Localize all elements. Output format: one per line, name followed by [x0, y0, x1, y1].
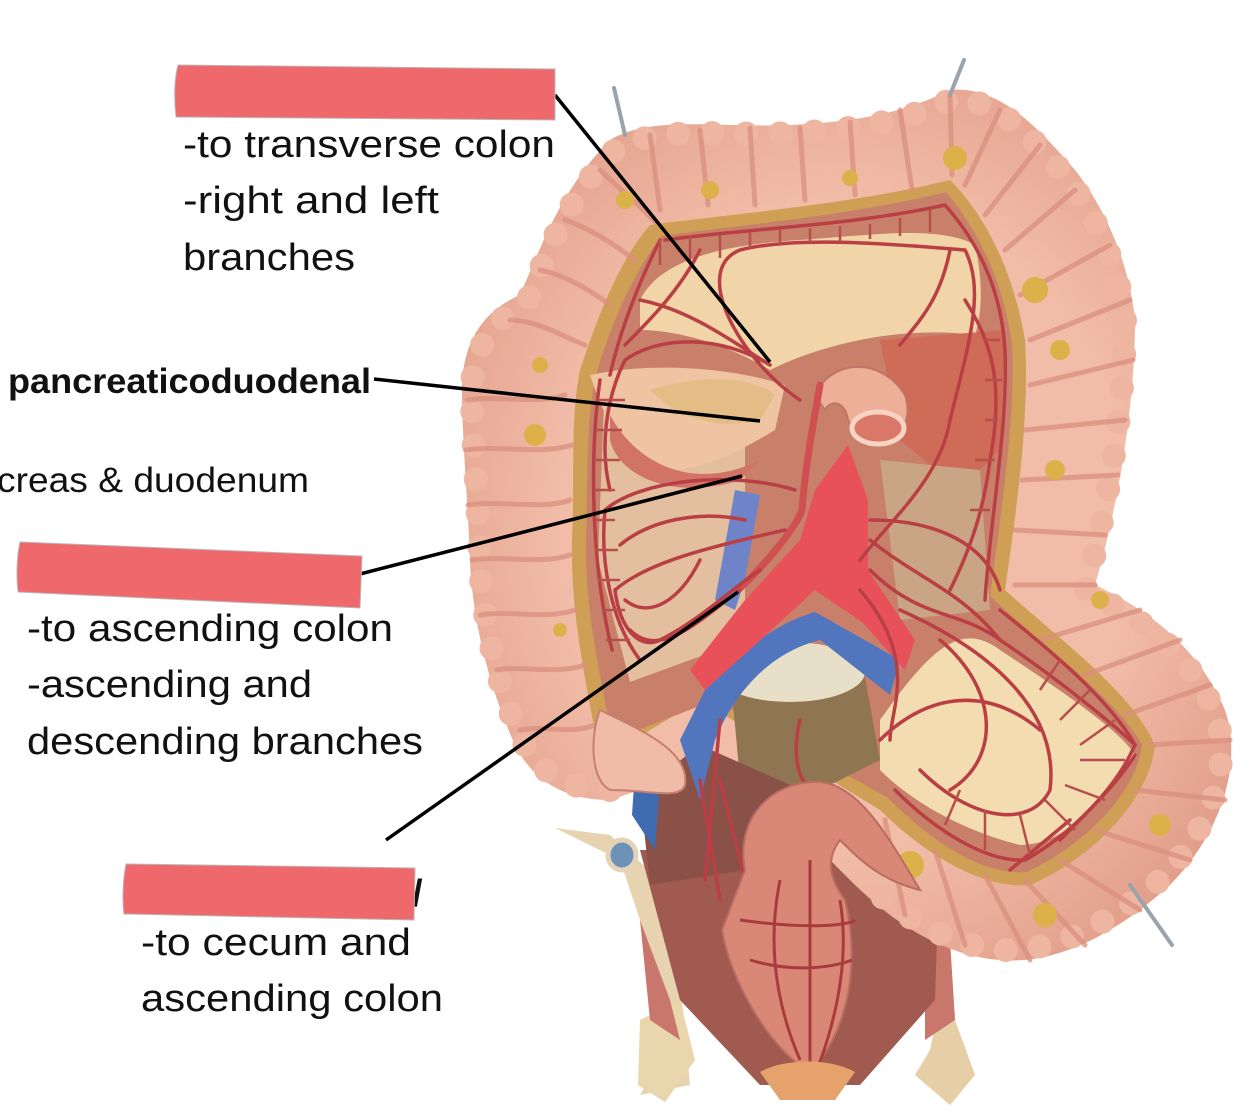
vasa recta	[594, 210, 1125, 855]
stomach stump / duodenal loop	[815, 367, 908, 445]
redaction label bar 2	[17, 542, 362, 608]
label: pancreaticoduodenal: pancreaticoduodenal	[8, 362, 371, 401]
text block: ascending colon branch	[27, 608, 423, 763]
anatomical illustration: large intestine and mesenteric arteries	[462, 60, 1231, 1105]
colon haustra folds	[466, 95, 1230, 960]
leader line: middle colic artery	[555, 95, 770, 362]
text block: cecum branch: -to cecum and	[141, 922, 411, 964]
pelvis and pelvic bones	[555, 828, 975, 1105]
cecum	[593, 710, 685, 793]
leader line: ileocolic artery	[386, 592, 738, 840]
redaction label bar 1	[175, 65, 555, 120]
superior mesenteric artery branches	[594, 205, 1135, 900]
text block: transverse colon branch: -right and left	[183, 180, 439, 222]
text block: transverse colon branch: -to transverse colon	[183, 124, 555, 166]
mesentery background	[572, 180, 1155, 885]
pelvic cavity	[640, 850, 940, 1085]
small vein near cecum	[632, 770, 660, 850]
central retroperitoneum	[730, 650, 880, 790]
text block: transverse colon branch	[183, 124, 555, 279]
text block: transverse colon branch: branches	[183, 237, 355, 279]
fat appendages	[524, 146, 1171, 927]
inferior vena cava	[715, 490, 760, 610]
leader line: inferior pancreaticoduodenal	[374, 379, 760, 421]
redaction label bar 3	[123, 864, 415, 920]
sigmoid colon	[722, 782, 920, 1072]
sigmoid mesocolon: cream panel	[880, 638, 1135, 845]
hidden label remainder glyph: /	[412, 873, 423, 915]
colon haustral lobes along outer edge	[472, 100, 1221, 950]
pancreas and duodenum	[590, 368, 785, 471]
text block: cecum branch: ascending colon	[141, 978, 443, 1020]
aorta and iliac arteries	[690, 445, 915, 690]
anal canal	[760, 1062, 855, 1100]
text block: ascending colon branch: -to ascending colon	[27, 608, 393, 650]
rectum vessels	[740, 860, 855, 1065]
dark pelvic inlet tissue	[640, 745, 790, 885]
text block: ascending colon branch: -ascending and	[27, 664, 312, 706]
retraction hooks	[614, 60, 1172, 945]
colon outer wall	[462, 90, 1231, 960]
text block: cecum branch	[141, 922, 443, 1020]
left mesentery tissue	[598, 375, 745, 682]
text block: ascending colon branch: descending branches	[27, 721, 423, 763]
transverse mesocolon: cream panel	[640, 233, 981, 370]
label: pancreas and duodenum: creas & duodenum	[0, 461, 309, 500]
leader line: right colic artery	[360, 476, 742, 574]
